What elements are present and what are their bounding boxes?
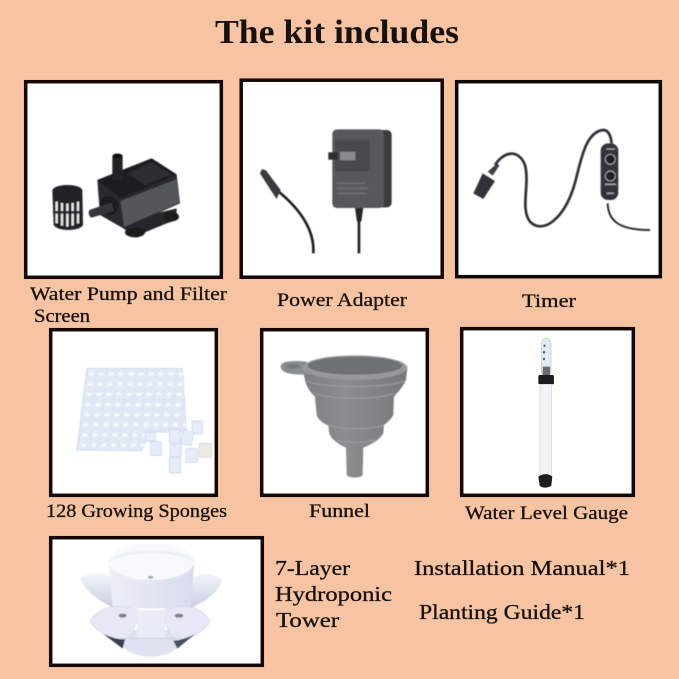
panel: hydroponic tower <box>51 538 262 665</box>
panel: water pump <box>26 82 221 277</box>
icon: tower module <box>80 543 222 657</box>
label: timer: Timer <box>522 291 577 312</box>
label: growing sponges: 128 Growing Sponges <box>46 501 227 522</box>
label: 7-layer hydroponic tower: 7-Layer <box>275 556 350 580</box>
label: 7-layer hydroponic tower: Tower <box>276 608 339 632</box>
icon: filter screen <box>52 185 83 230</box>
icon: loose sponge cubes <box>145 421 212 473</box>
icon: gauge <box>538 338 554 488</box>
title: The kit includes <box>215 14 459 51</box>
icon: adapter cord <box>260 169 313 253</box>
panel: funnel <box>262 330 427 495</box>
label: installation manual: Installation Manual*1 <box>414 556 630 580</box>
label: water pump and filter screen: Water Pump and Filter <box>30 284 228 305</box>
icon: sponge sheet <box>77 368 187 451</box>
icon: pump body <box>89 153 180 238</box>
icon: timer cord <box>473 130 650 230</box>
label: 7-layer hydroponic tower: Hydroponic <box>275 582 392 606</box>
icon: adapter <box>328 129 392 253</box>
label: 7-layer hydroponic tower <box>275 556 392 632</box>
label: planting guide: Planting Guide*1 <box>419 600 585 624</box>
panel: timer <box>457 82 660 277</box>
panel: growing sponges <box>51 330 216 495</box>
panel: water level gauge <box>462 329 633 495</box>
icon: funnel <box>281 355 407 477</box>
label: funnel: Funnel <box>309 501 370 522</box>
label: water level gauge: Water Level Gauge <box>465 503 628 524</box>
panel: power adapter <box>241 80 442 277</box>
label: power adapter: Power Adapter <box>277 290 408 311</box>
label: screen: Screen <box>34 306 91 327</box>
